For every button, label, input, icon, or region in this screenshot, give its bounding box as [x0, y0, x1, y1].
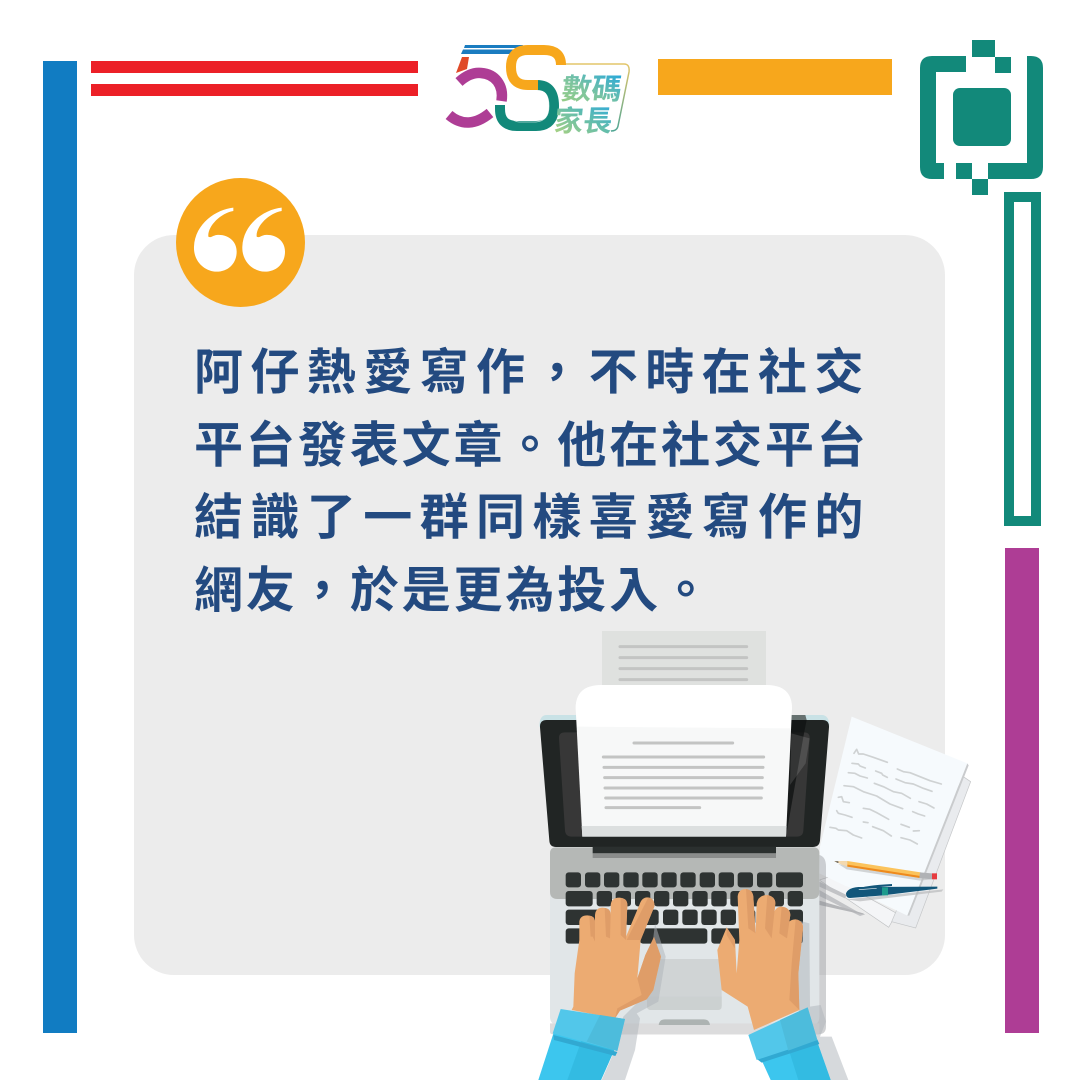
hand and arm shadows	[602, 920, 848, 1080]
pencil	[834, 861, 937, 881]
quote text: 網友，於是更為投入。	[194, 564, 713, 618]
quote text: 結識了一群同樣喜愛寫作的	[194, 491, 871, 545]
grey quote panel	[134, 235, 945, 975]
left sleeve	[538, 1009, 625, 1080]
keyboard	[566, 872, 803, 944]
top red double bar	[91, 61, 418, 96]
paper coming out of the back	[602, 631, 766, 686]
quote text: 阿仔熱愛寫作，不時在社交	[194, 346, 871, 400]
laptop base	[550, 847, 826, 1034]
logo: 55 數碼家長: 家長	[552, 105, 614, 138]
laptop screen	[539, 715, 829, 847]
touchpad	[647, 959, 722, 1025]
top orange bar	[658, 59, 892, 95]
logo: 55 數碼家長	[449, 45, 629, 138]
right hand	[717, 889, 803, 1030]
right teal outlined bar	[1004, 192, 1041, 526]
pen	[846, 884, 943, 901]
left hand	[572, 897, 661, 1018]
right purple bar	[1005, 548, 1039, 1033]
right sleeve	[748, 1007, 831, 1080]
logo: 55 數碼家長: 數碼	[560, 73, 623, 106]
illustration: laptop, hands and papers	[539, 631, 971, 928]
loose papers	[819, 717, 971, 928]
sheet in the screen	[576, 685, 792, 837]
orange quote badge	[176, 178, 305, 307]
quote text: 平台發表文章。他在社交平台	[194, 419, 869, 473]
left blue bar	[43, 61, 77, 1033]
teal pixel icon	[920, 40, 1043, 195]
quote text	[194, 346, 871, 618]
